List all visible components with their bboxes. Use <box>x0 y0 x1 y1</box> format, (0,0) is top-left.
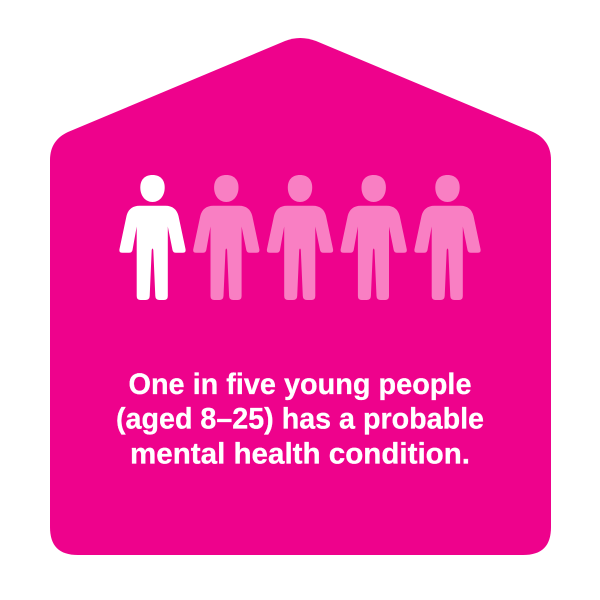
statement text: One in five young people <box>128 368 472 401</box>
icon: highlighted person <box>119 175 186 300</box>
icon: person 2 <box>193 175 259 300</box>
icon: person 5 <box>414 175 481 300</box>
house-shaped panel <box>50 38 551 555</box>
statement text <box>116 368 484 470</box>
icon row: five people <box>119 175 481 300</box>
icon: person 3 <box>267 175 333 300</box>
statement text: (aged 8–25) has a probable <box>116 402 484 436</box>
statement text: mental health condition. <box>130 438 470 470</box>
icon: person 4 <box>341 175 407 300</box>
